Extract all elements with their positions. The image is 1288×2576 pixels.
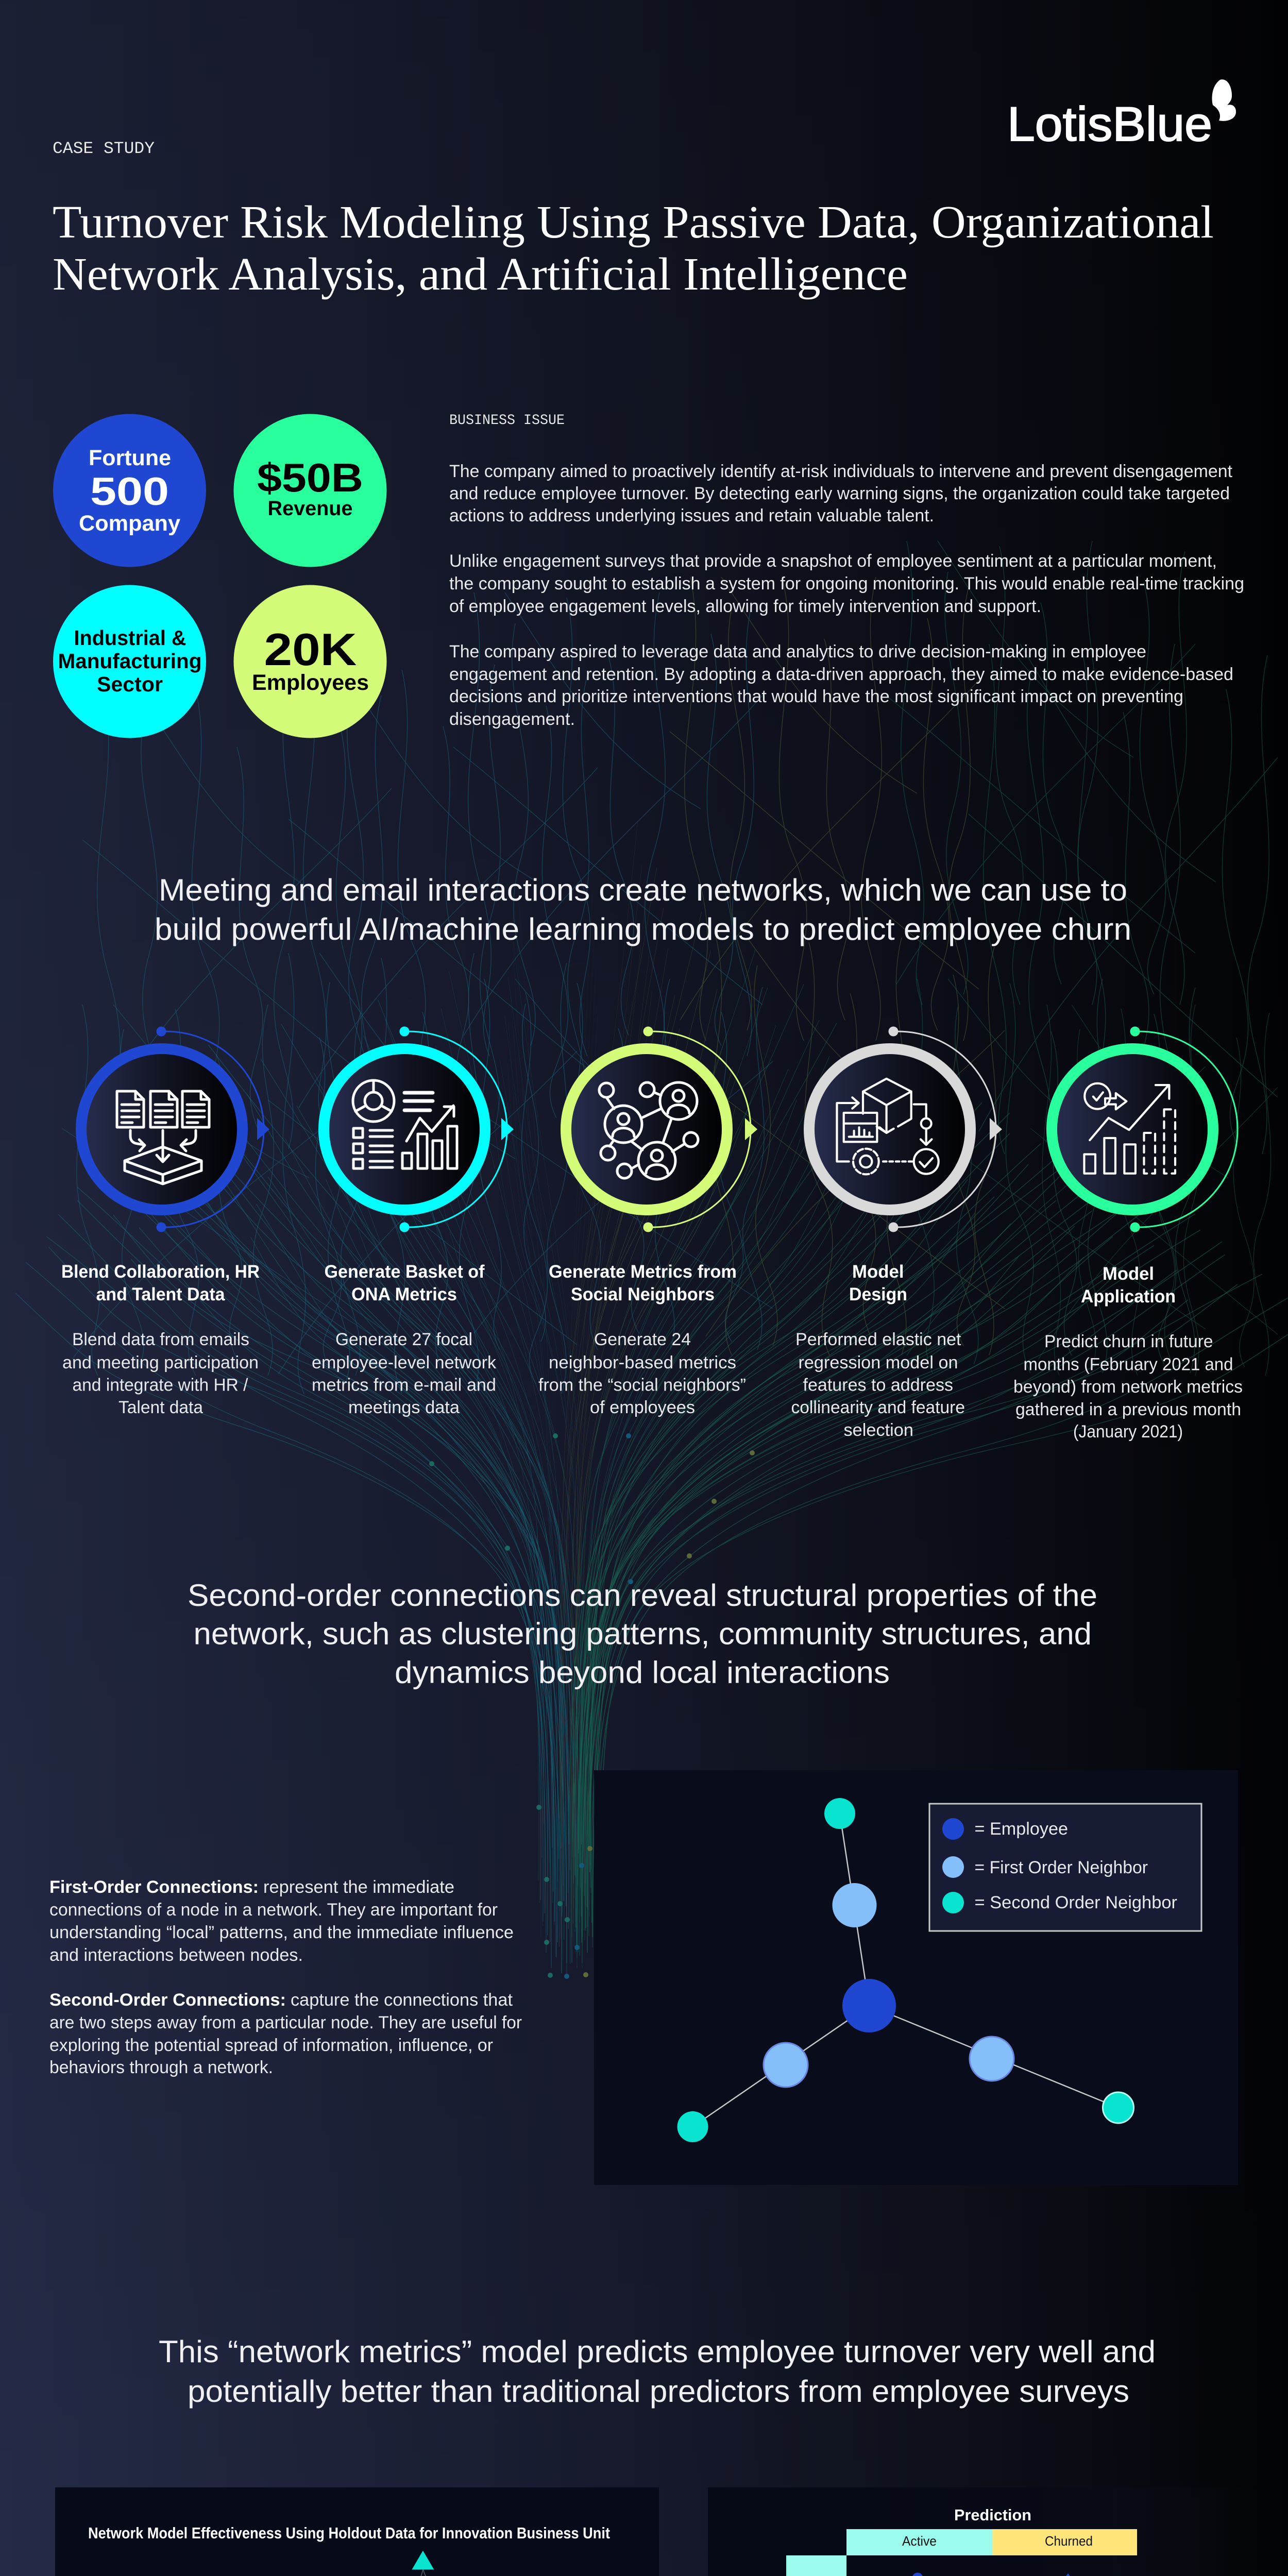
step 1 text: Talent data	[118, 1398, 203, 1417]
text: first and second order connections: understanding “local” patterns, and the immediate influence	[49, 1923, 514, 1942]
step 3 text: of employees	[590, 1398, 695, 1417]
step 1 text: Blend data from emails	[72, 1330, 249, 1349]
stat: industrial and manufacturing sector: Manufacturing	[58, 649, 202, 673]
title	[53, 197, 1214, 300]
step 2 text: Generate Basket of	[325, 1262, 485, 1282]
node: first order left	[764, 2043, 808, 2087]
text: first and second order connections: First-Order Connections:	[49, 1877, 259, 1897]
step 1 icon ring: blend data	[81, 1026, 269, 1232]
business issue text: Unlike engagement surveys that provide a snapshot of employee sentiment at a particular moment,	[449, 551, 1217, 571]
logo: LotisBlue: LotisBlue	[1007, 97, 1212, 151]
grey edges	[108, 2568, 610, 2576]
diagram edges	[692, 1814, 1118, 2127]
business issue heading: BUSINESS ISSUE	[449, 413, 565, 429]
matrix header: prediction	[846, 2506, 1137, 2555]
step 5 text: (January 2021)	[1073, 1422, 1183, 1442]
heading: meeting and email networks	[155, 873, 1131, 946]
stat: $50B revenue	[234, 414, 386, 567]
stat: industrial and manufacturing sector: Sector	[97, 672, 163, 696]
step 2 text: meetings data	[348, 1398, 460, 1417]
step 5 text: Application	[1081, 1286, 1176, 1307]
text: first and second order connections	[49, 1877, 522, 2077]
matrix header: prediction: Active	[902, 2533, 937, 2549]
text: first and second order connections: exploring the potential spread of information, influence, or	[49, 2036, 493, 2055]
text: first and second order connections: Second-Order Connections:	[49, 1990, 286, 2010]
business issue text: actions to address underlying issues and retain valuable talent.	[449, 506, 934, 526]
step 5 text: Model	[1103, 1264, 1154, 1284]
panel: network chart	[55, 2487, 659, 2576]
teal triangles	[165, 2551, 576, 2576]
node: second order top	[824, 1798, 855, 1829]
stat: industrial and manufacturing sector	[53, 585, 206, 738]
matrix header: prediction: Prediction	[954, 2506, 1031, 2524]
step 4 text: features to address	[803, 1376, 953, 1395]
stat: $50B revenue: Revenue	[268, 497, 352, 520]
heading: second-order connections: Second-order connections can reveal structural properties of the	[188, 1578, 1097, 1613]
step 5 text	[1013, 1264, 1243, 1442]
label: case study: CASE STUDY	[53, 139, 155, 158]
step 3 text: Generate 24	[594, 1330, 691, 1349]
heading: second-order connections: network, such as clustering patterns, community structures, and	[194, 1617, 1092, 1651]
heading: meeting and email networks: build powerful AI/machine learning models to predict employee churn	[155, 912, 1131, 946]
legend: = First Order Neighbor	[975, 1858, 1148, 1877]
logo: LotisBlue	[1007, 79, 1236, 151]
heading: network metrics model: potentially better than traditional predictors from employee surveys	[188, 2374, 1129, 2409]
step 1 text: and integrate with HR /	[72, 1376, 248, 1395]
step 4 text: collinearity and feature	[791, 1398, 965, 1417]
step 2 text: employee-level network	[312, 1353, 497, 1372]
business issue text: of employee engagement levels, allowing for timely intervention and support.	[449, 597, 1041, 616]
business issue text: The company aspired to leverage data and analytics to drive decision-making in employee	[449, 642, 1146, 662]
cell: correctly predicted stayer	[874, 2573, 960, 2576]
panel: confusion matrix	[708, 2487, 1250, 2576]
text: first and second order connections: behaviors through a network.	[49, 2058, 273, 2077]
title: Turnover Risk Modeling Using Passive Data, Organizational	[53, 197, 1214, 248]
business issue text	[449, 462, 1244, 729]
stat: 20K employees	[234, 585, 386, 738]
step 4 icon ring: model design	[809, 1026, 1002, 1232]
business issue text: The company aimed to proactively identify at-risk individuals to intervene and prevent disengagement	[449, 462, 1233, 481]
step 3 text: Generate Metrics from	[549, 1262, 737, 1282]
step 5 text: Predict churn in future	[1044, 1332, 1213, 1351]
step 3 text: from the “social neighbors”	[538, 1376, 746, 1395]
stat: industrial and manufacturing sector: Industrial &	[74, 626, 187, 650]
heading: meeting and email networks: Meeting and email interactions create networks, which we can use to	[159, 873, 1127, 907]
step 5 text: gathered in a previous month	[1015, 1400, 1241, 1419]
network graph	[104, 2551, 621, 2576]
panel: node diagram	[594, 1770, 1238, 2185]
business issue text: the company sought to establish a system for ongoing monitoring. This would enable real-time tracking	[449, 574, 1244, 594]
business issue text: engagement and retention. By adopting a data-driven approach, they aimed to make evidence-based	[449, 665, 1233, 684]
step 5 text: months (February 2021 and	[1023, 1355, 1233, 1375]
step 2 icon ring: ONA metrics	[324, 1026, 514, 1232]
chart title: Network Model Effectiveness Using Holdout Data for Innovation Business Unit	[88, 2524, 610, 2542]
heading: second-order connections: dynamics beyond local interactions	[395, 1655, 890, 1690]
heading: second-order connections	[188, 1578, 1097, 1690]
legend: = Second Order Neighbor	[975, 1893, 1177, 1912]
step 4 text: Model	[852, 1262, 904, 1282]
node: first order top	[833, 1883, 877, 1927]
stat: Fortune 500 Company: 500	[90, 470, 169, 514]
title: Network Analysis, and Artificial Intelligence	[53, 249, 908, 300]
step 4 text	[791, 1262, 965, 1440]
step 1 text	[61, 1262, 260, 1417]
legend: = Employee	[975, 1819, 1068, 1839]
text: first and second order connections: are two steps away from a particular node. They are useful for	[49, 2013, 522, 2032]
step 1 text: and Talent Data	[96, 1284, 225, 1304]
node: second order left	[677, 2111, 708, 2142]
step 1 text: and meeting participation	[62, 1353, 259, 1372]
text: first and second order connections: and interactions between nodes.	[49, 1945, 303, 1965]
step 3 text: Social Neighbors	[571, 1284, 715, 1304]
step 3 text: neighbor-based metrics	[549, 1353, 736, 1372]
node: first order right	[970, 2037, 1014, 2081]
step 5 text: beyond) from network metrics	[1013, 1377, 1243, 1397]
step 4 text: regression model on	[799, 1353, 958, 1372]
step 2 text: Generate 27 focal	[335, 1330, 472, 1349]
stat: 20K employees: 20K	[264, 624, 357, 675]
stat: Fortune 500 Company: Fortune	[89, 446, 171, 470]
step 4 text: Design	[849, 1284, 907, 1304]
step 3 icon ring: social neighbors	[566, 1026, 757, 1232]
legend	[929, 1804, 1201, 1931]
stat: Fortune 500 Company	[53, 414, 206, 567]
stat: 20K employees: Employees	[252, 670, 369, 695]
text: first and second order connections: connections of a node in a network. They are important for	[49, 1900, 498, 1920]
cell: incorrectly predicted churner	[1021, 2573, 1115, 2576]
text: first and second order connections: represent the immediate	[263, 1877, 454, 1897]
step 5 icon ring: model application	[1052, 1026, 1238, 1232]
step 4 text: Performed elastic net	[795, 1330, 961, 1349]
stat: $50B revenue: $50B	[257, 455, 363, 500]
node: second order right	[1103, 2092, 1133, 2123]
step 4 text: selection	[844, 1420, 913, 1440]
heading: network metrics model	[159, 2334, 1156, 2409]
business issue text: decisions and prioritize interventions that would have the most significant impact on preventing	[449, 687, 1183, 706]
decorative network background	[15, 540, 1288, 1979]
step 2 text	[312, 1262, 497, 1417]
heading: network metrics model: This “network metrics” model predicts employee turnover very well and	[159, 2334, 1156, 2369]
node: employee	[842, 1979, 896, 2032]
text: first and second order connections: capture the connections that	[291, 1990, 513, 2010]
matrix header: prediction: Churned	[1045, 2533, 1093, 2549]
step 3 text	[538, 1262, 746, 1417]
business issue text: and reduce employee turnover. By detecting early warning signs, the organization could take targeted	[449, 484, 1230, 503]
step 2 text: metrics from e-mail and	[312, 1376, 496, 1395]
stat: Fortune 500 Company: Company	[79, 511, 180, 536]
step 2 text: ONA Metrics	[351, 1284, 457, 1304]
step 1 text: Blend Collaboration, HR	[61, 1262, 260, 1282]
business issue text: disengagement.	[449, 709, 575, 729]
matrix row header: truth	[733, 2555, 846, 2576]
